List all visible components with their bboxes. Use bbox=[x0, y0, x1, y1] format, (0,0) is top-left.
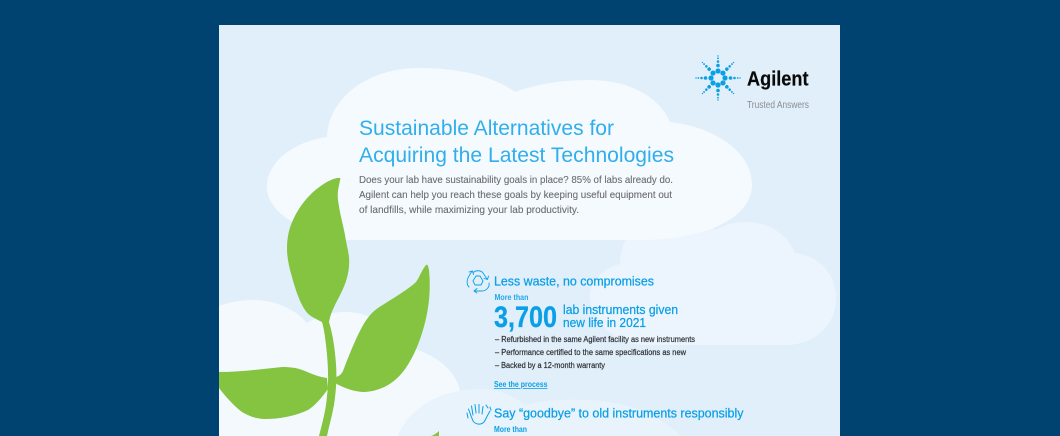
wordmark: Agilent bbox=[747, 68, 809, 90]
section: say goodbye bbox=[467, 404, 744, 434]
title: Acquiring the Latest Technologies bbox=[359, 143, 674, 167]
right leaf bbox=[335, 265, 430, 392]
heading: Less waste, no compromises bbox=[494, 274, 654, 288]
bullet list: – Performance certified to the same specifications as new bbox=[495, 348, 686, 357]
left leaf bbox=[219, 367, 328, 419]
icon: recycle bbox=[467, 271, 489, 293]
stat caption: lab instruments given bbox=[563, 302, 678, 317]
stat label: More than bbox=[494, 425, 527, 434]
title: Sustainable Alternatives for bbox=[359, 116, 614, 140]
stat caption bbox=[563, 302, 678, 330]
stat caption: new life in 2021 bbox=[563, 315, 646, 330]
intro text bbox=[359, 175, 673, 216]
link: See the process bbox=[494, 380, 548, 389]
plant illustration bbox=[219, 178, 439, 436]
cloud: bottom bbox=[398, 391, 461, 436]
cloud: right bbox=[590, 212, 836, 345]
stem bbox=[319, 322, 336, 436]
intro text: of landfills, while maximizing your lab productivity. bbox=[359, 205, 579, 216]
bullet list: – Refurbished in the same Agilent facility as new instruments bbox=[495, 335, 695, 344]
bullet list bbox=[495, 335, 695, 370]
cloud: lower left bbox=[219, 300, 461, 436]
intro text: Agilent can help you reach these goals by keeping useful equipment out bbox=[359, 190, 672, 201]
stat number: 3,700 bbox=[494, 301, 557, 334]
top leaf bbox=[287, 178, 349, 322]
bullet list: – Backed by a 12-month warranty bbox=[495, 361, 605, 370]
icon: spark bbox=[695, 55, 741, 101]
logo: Agilent bbox=[695, 55, 809, 111]
cloud: header bbox=[267, 68, 752, 240]
heading: Say “goodbye” to old instruments responsibly bbox=[494, 406, 744, 420]
tagline: Trusted Answers bbox=[747, 100, 809, 111]
intro text: Does your lab have sustainability goals in place? 85% of labs already do. bbox=[359, 175, 673, 186]
small sprout tip bbox=[431, 431, 439, 436]
icon: waving hand bbox=[467, 404, 491, 424]
background clouds bbox=[219, 68, 836, 436]
section: less waste bbox=[467, 271, 695, 389]
title bbox=[359, 116, 674, 167]
page panel bbox=[219, 25, 840, 436]
stat label: More than bbox=[494, 293, 529, 302]
